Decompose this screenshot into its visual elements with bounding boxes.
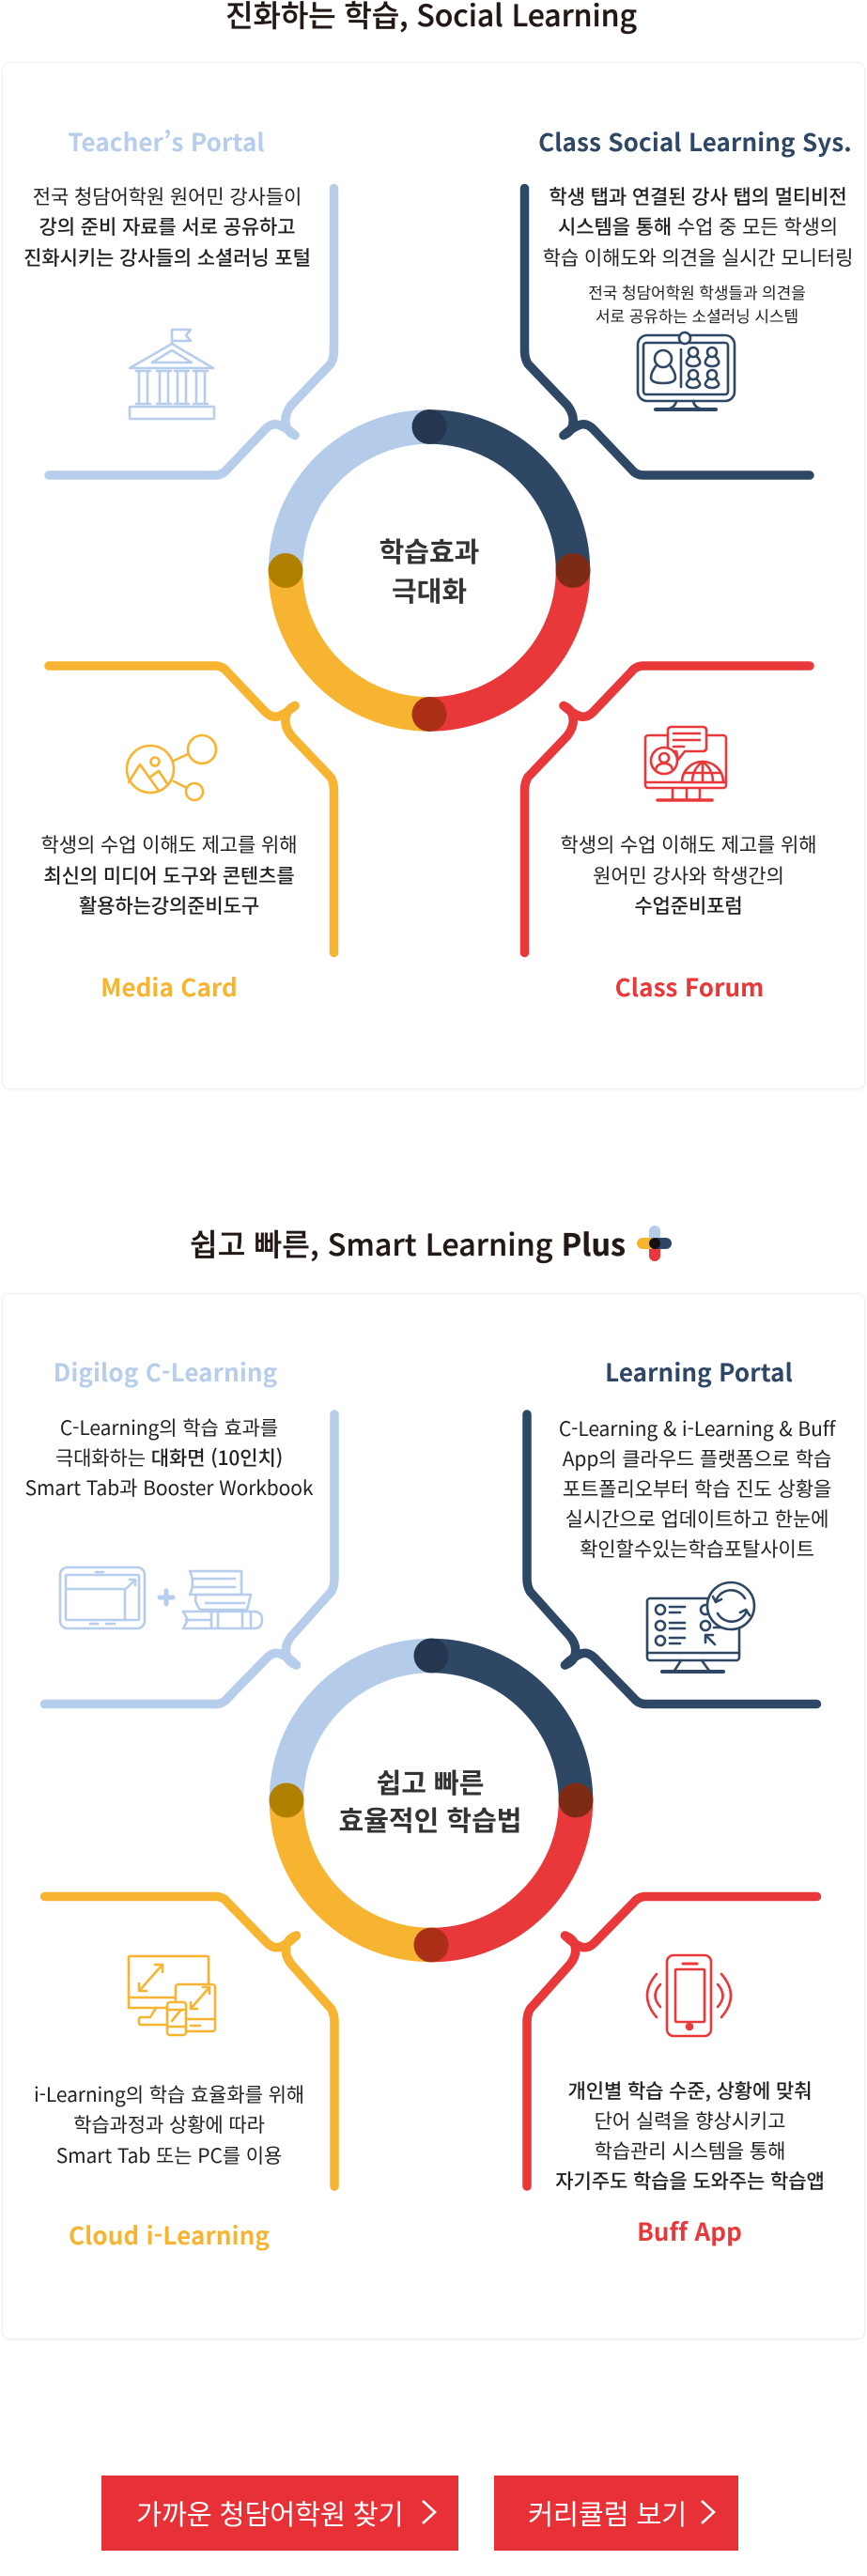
heading: Class Social Learning Sys.: Class Social Learning Sys. xyxy=(538,124,852,158)
icon: forum monitor xyxy=(645,727,726,800)
text: Class Social Learning description xyxy=(543,182,853,270)
connector: Digilog C-Learning xyxy=(45,1414,334,1704)
text: Learning Portal description xyxy=(559,1414,836,1563)
connector: Buff App xyxy=(527,1897,817,2186)
text: ring centre xyxy=(339,1762,521,1839)
text: ring centre: 학습효과 xyxy=(379,531,479,570)
button: find nearest academy: 가까운 청담어학원 찾기 xyxy=(136,2493,403,2533)
text: Teacher's Portal description xyxy=(23,182,311,270)
text: Class Social Learning note: 전국 청담어학원 학생들과 의견을 xyxy=(588,280,806,302)
text: Cloud i-Learning description: i-Learning의 학습 효율화를 위해 xyxy=(34,2079,304,2107)
text: Learning Portal description: 실시간으로 업데이트하고 한눈에 xyxy=(565,1504,828,1533)
text: Media Card description: 최신의 미디어 도구와 콘텐츠를 xyxy=(43,860,295,888)
text: Class Social Learning description: 학습 이해도와 의견을 실시간 모니터링 xyxy=(543,242,853,270)
ring chart xyxy=(269,1638,594,1963)
text: Class Social Learning description: 학생 탭과 연결된 강사 탭의 멀티비전 xyxy=(549,182,847,210)
title: Smart Learning Plus: 쉽고 빠른, Smart Learning Plus xyxy=(190,1222,626,1265)
text: Teacher's Portal description: 전국 청담어학원 원어민 강사들이 xyxy=(33,182,302,210)
ring chart xyxy=(269,409,590,732)
text: Buff App description: 학습관리 시스템을 통해 xyxy=(595,2136,785,2165)
text: Digilog description xyxy=(25,1413,314,1502)
icon: plus mark xyxy=(637,1226,672,1261)
diagram: ring, connectors and icons xyxy=(44,184,814,958)
icon: tablet and books xyxy=(60,1567,262,1628)
connector: Class Forum xyxy=(524,666,810,952)
text: Learning Portal description: 확인할수있는학습포탈사이트 xyxy=(580,1535,814,1563)
text: Cloud i-Learning description: Smart Tab 또는 PC를 이용 xyxy=(56,2141,282,2169)
button: view curriculum xyxy=(494,2476,738,2551)
heading: Buff App: Buff App xyxy=(637,2214,742,2248)
text: Teacher's Portal description: 강의 준비 자료를 서로 공유하고 xyxy=(39,212,295,240)
text: ring centre xyxy=(379,531,479,609)
text: Buff App description: 개인별 학습 수준, 상황에 맞춰 xyxy=(568,2076,812,2105)
text: Class Forum description xyxy=(560,830,816,919)
button: find nearest academy xyxy=(101,2476,458,2551)
text: Class Social Learning note: 서로 공유하는 소셜러닝 시스템 xyxy=(596,302,798,327)
text: Digilog description: Smart Tab과 Booster Workbook xyxy=(25,1473,313,1502)
text: Class Social Learning note xyxy=(588,280,806,327)
text: Buff App description xyxy=(555,2076,825,2195)
icon: vibrating phone xyxy=(647,1955,731,2036)
text: Cloud i-Learning description xyxy=(34,2079,304,2169)
text: Buff App description: 자기주도 학습을 도와주는 학습앱 xyxy=(555,2167,825,2195)
text: Class Forum description: 학생의 수업 이해도 제고를 위해 xyxy=(560,830,816,858)
text: Digilog description: C-Learning의 학습 효과를 xyxy=(60,1413,278,1442)
connector: Teacher's Portal xyxy=(49,188,334,475)
heading: Learning Portal: Learning Portal xyxy=(605,1354,793,1389)
icon: temple xyxy=(130,330,214,419)
text: Class Forum description: 수업준비포럼 xyxy=(634,891,743,919)
heading: Class Forum: Class Forum xyxy=(615,969,764,1003)
text: Teacher's Portal description: 진화시키는 강사들의 소셜러닝 포털 xyxy=(23,242,311,270)
text: Media Card description: 활용하는강의준비도구 xyxy=(79,891,259,919)
text: Media Card description: 학생의 수업 이해도 제고를 위해 xyxy=(41,830,297,858)
connector: Learning Portal xyxy=(527,1414,817,1704)
icon: responsive devices xyxy=(129,1956,215,2035)
connector: Media Card xyxy=(49,666,334,952)
heading: Digilog C-Learning: Digilog C-Learning xyxy=(54,1354,277,1389)
icon: media network xyxy=(127,735,216,800)
text: ring centre: 쉽고 빠른 xyxy=(377,1762,484,1801)
text: Cloud i-Learning description: 학습과정과 상황에 따라 xyxy=(73,2110,265,2138)
heading: Media Card: Media Card xyxy=(101,969,238,1003)
text: Media Card description xyxy=(41,830,297,919)
heading: Cloud i-Learning: Cloud i-Learning xyxy=(69,2217,270,2252)
text: Learning Portal description: C-Learning & i-Learning & Buff xyxy=(559,1414,835,1442)
text: ring centre: 극대화 xyxy=(392,570,467,609)
text: Learning Portal description: 포트폴리오부터 학습 진도 상황을 xyxy=(563,1474,831,1503)
heading: Teacher's Portal: Teacher’s Portal xyxy=(68,124,265,158)
connector: Class Social Learning Sys. xyxy=(524,188,810,475)
text: Buff App description: 단어 실력을 향상시키고 xyxy=(595,2106,785,2135)
panel: Social Learning xyxy=(2,62,865,1089)
button: view curriculum: 커리큘럼 보기 xyxy=(528,2493,687,2533)
text: Digilog description: 극대화하는 대화면 (10인치) xyxy=(55,1443,283,1472)
text: Learning Portal description: App의 클라우드 플랫폼으로 학습 xyxy=(563,1444,831,1473)
panel: Smart Learning Plus xyxy=(2,1293,865,2339)
text: Class Forum description: 원어민 강사와 학생간의 xyxy=(593,860,784,888)
text: Class Social Learning description: 시스템을 통해 수업 중 모든 학생의 xyxy=(558,212,838,240)
connector: Cloud i-Learning xyxy=(45,1897,334,2186)
icon: portal monitor xyxy=(647,1582,754,1672)
icon: multivision monitor xyxy=(638,332,735,409)
text: ring centre: 효율적인 학습법 xyxy=(339,1799,521,1839)
